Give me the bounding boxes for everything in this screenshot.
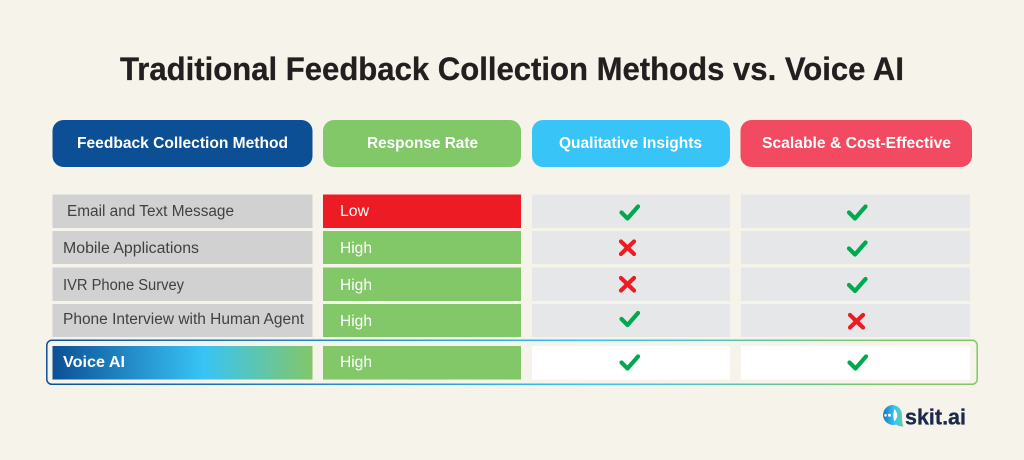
header: feedback collection method: Feedback Collection Method — [77, 135, 288, 152]
row: mobile applications — [52, 231, 970, 264]
header: scalable and cost-effective — [740, 120, 972, 167]
row: mobile applications: High — [340, 240, 372, 257]
row: email and text message: Email and Text Message — [67, 203, 234, 220]
header: response rate — [323, 120, 521, 167]
highlighted row: voice ai — [47, 340, 977, 384]
header: qualitative insights: Qualitative Insights — [559, 135, 702, 152]
row: email and text message — [52, 194, 970, 228]
row: ivr phone survey: High — [340, 277, 372, 294]
header row — [52, 120, 972, 167]
row: ivr phone survey: IVR Phone Survey — [63, 277, 184, 294]
row: phone interview with human agent — [52, 304, 970, 337]
highlighted row: voice ai: High — [340, 354, 372, 371]
row: phone interview with human agent: High — [340, 313, 372, 330]
highlighted row: voice ai: Voice AI — [63, 354, 125, 371]
header: qualitative insights — [532, 120, 730, 167]
icon: speech bubble — [883, 405, 904, 426]
header: feedback collection method — [52, 120, 312, 167]
row: phone interview with human agent: Phone Interview with Human Agent — [63, 311, 305, 328]
header: response rate: Response Rate — [367, 135, 478, 152]
row: mobile applications: Mobile Applications — [63, 240, 199, 257]
header: scalable and cost-effective: Scalable & Cost-Effective — [762, 135, 951, 152]
row: email and text message: Low — [340, 203, 370, 220]
logo: skit.ai: skit.ai — [905, 404, 966, 430]
row: ivr phone survey — [52, 268, 970, 301]
title: Traditional Feedback Collection Methods vs. Voice AI — [120, 51, 904, 87]
